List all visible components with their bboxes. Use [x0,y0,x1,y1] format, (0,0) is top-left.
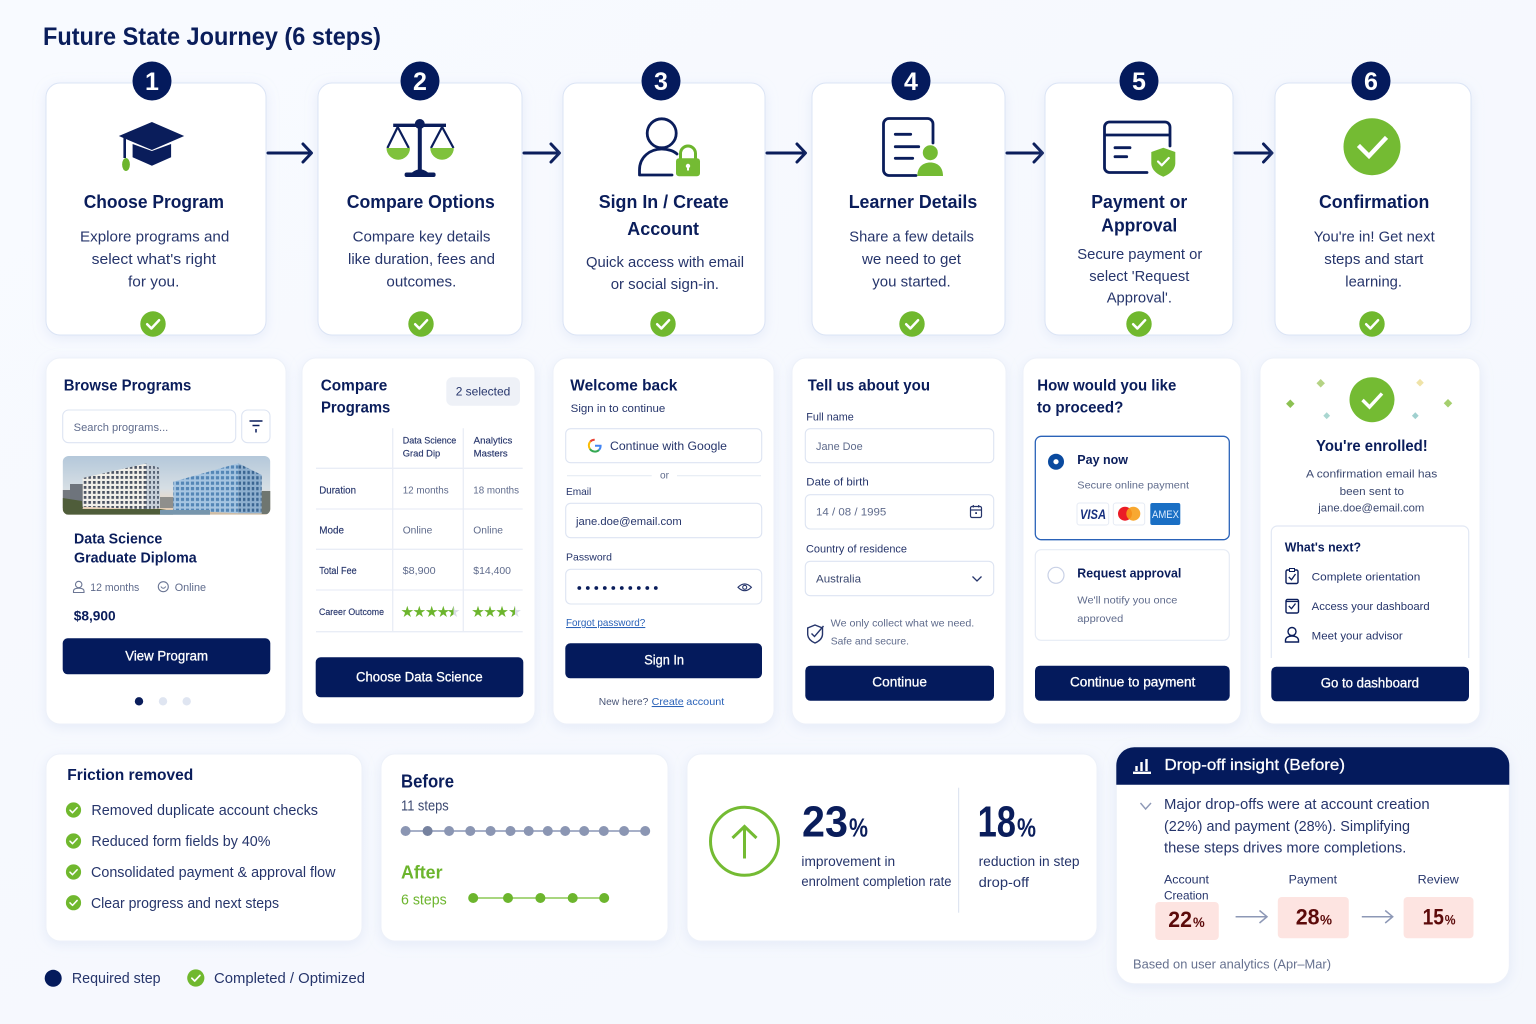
badge: 2 selected: 2 selected [456,385,510,399]
privacy note with shield icon [808,618,974,647]
arrow: payment to review [1362,910,1393,923]
panel: step 1 choose program [46,62,266,337]
field: date of birth: 14 / 08 / 1995 [816,507,886,519]
payment logo: mastercard [1113,503,1145,525]
panel: how would you like to proceed [1023,358,1241,724]
completed check [1359,311,1385,337]
title: Future State Journey (6 steps) [43,23,381,51]
source note: Based on user analytics (Apr–Mar) [1133,957,1331,971]
option: request approval: approved [1077,613,1123,625]
stage: payment 28%: Payment [1289,872,1338,886]
icon: large check [1344,118,1400,175]
insight text: Major drop-offs were at account creation [1164,797,1430,813]
program name: Data Science [74,530,162,547]
subheading: Sign in to continue [571,403,665,415]
button: continue: Continue [872,675,927,690]
comparison table: 18 months [473,484,519,496]
insight text: (22%) and payment (28%). Simplifying [1164,819,1410,835]
search field: Search programs... [74,422,168,434]
step number 1: 1 [145,68,159,96]
description: Secure payment or [1077,246,1202,263]
comparison table: $8,900 [403,565,436,577]
after step count: 6 steps [401,892,447,908]
button: continue [805,666,994,701]
arrow: account to payment [1236,910,1267,923]
button: continue to payment [1035,666,1230,701]
heading: Compare Options [347,191,495,212]
completed check [899,311,925,337]
arrow 4 to 5 [1007,144,1042,162]
button: go to dashboard [1271,667,1469,701]
field: full name: Jane Doe [816,441,863,453]
description: Quick access with email [586,254,744,271]
heading: Approval [1101,214,1177,236]
insight header [1116,747,1509,785]
stage: review 15%: % [1445,912,1456,928]
heading: Tell us about you [808,378,930,395]
icon: filter button [242,410,270,443]
field: country of residence: Australia [816,574,862,586]
program meta: duration and mode: Online [175,582,206,594]
item: clear progress: Clear progress and next steps [91,896,279,912]
rating stars: analytics [472,606,521,617]
before step count: 11 steps [401,799,449,815]
completed check [140,311,166,337]
stage: review 15% [1404,872,1474,938]
program name: Graduate Diploma [74,550,197,567]
create account prompt [599,696,724,708]
item: meet your advisor [1286,628,1403,642]
button: sign in [565,643,762,678]
stage: account creation 22%: Creation [1164,888,1208,902]
completed check [408,311,434,337]
description [1077,246,1202,307]
insight text [1164,797,1430,856]
panel: browse programs [46,358,286,724]
metric: 23% improvement: improvement in [801,854,895,869]
panel: outcome metrics [687,754,1097,941]
option: request approval: We'll notify you once [1077,594,1177,606]
program meta: duration and mode [74,581,206,594]
icon: document with person [884,118,943,176]
heading [1091,191,1187,236]
heading: Browse Programs [64,378,191,395]
rating stars: data science [401,606,459,617]
description: Approval'. [1107,290,1172,307]
legend: completed / optimized: Completed / Optimized [214,971,365,987]
carousel dots [135,697,191,706]
program meta: duration and mode: 12 months [90,582,140,594]
panel: step 3 sign in [563,62,765,337]
program name [74,530,197,567]
confirmation message [1306,469,1438,515]
payment logo: amex [1150,503,1180,525]
step number 6 [1352,62,1390,100]
panel: welcome back sign in [553,358,774,724]
heading: Payment or [1091,191,1187,212]
option: pay now: Secure online payment [1077,479,1189,491]
metric: 18% reduction [978,798,1080,890]
button: view program: View Program [125,649,208,664]
before timeline [401,826,650,836]
field: email [566,486,762,538]
button: continue with google [566,429,762,463]
heading: Choose Program [84,191,224,212]
comparison table: Masters [474,449,508,460]
description: for you. [128,274,179,290]
field: email: Email [566,486,591,498]
heading: Programs [321,400,390,417]
panel: friction removed [46,754,362,941]
heading: Sign In / Create [599,191,729,212]
comparison table: Total Fee [319,566,357,577]
heading: Compare [321,378,387,395]
comparison table: Online [473,524,503,536]
comparison table: Career Outcome [319,607,384,618]
stage: account creation 22%: 22 [1168,907,1192,932]
metric: 18% reduction: % [1017,813,1036,843]
description [586,254,744,293]
before heading: Before [401,771,454,791]
field: full name: Full name [806,412,854,424]
metric: 18% reduction: drop-off [979,875,1029,890]
panel: compare programs [302,358,535,724]
button: continue to payment: Continue to payment [1070,675,1196,690]
comparison table: Analytics [474,435,513,446]
payment logo: visa: VISA [1080,507,1106,522]
metric: 23% improvement [801,798,952,889]
insight header: Drop-off insight (Before) [1164,757,1345,774]
heading [321,378,390,417]
stage: payment 28%: % [1320,912,1333,928]
stage: account creation 22%: Account [1164,872,1210,886]
step number 4: 4 [904,68,918,96]
button: view program [63,638,270,674]
heading: Learner Details [849,191,977,212]
description: Compare key details [353,228,490,246]
item: access your dashboard: Access your dashboard [1312,601,1430,613]
comparison table: Mode [319,525,344,536]
heading [1037,378,1176,417]
description: or social sign-in. [611,276,719,293]
stage: review 15%: 15 [1423,904,1444,930]
option: pay now [1035,436,1229,540]
button: choose data science [316,657,523,697]
button: sign in: Sign In [644,652,684,667]
panel: step 5 payment or approval [1045,62,1233,337]
comparison table: Duration [319,485,356,496]
button: go to dashboard: Go to dashboard [1321,675,1419,690]
description: select what's right [92,251,217,268]
panel: step 6 confirmation [1275,62,1471,337]
step number 1 [132,62,172,100]
field: password: Password [566,552,612,564]
step number 4 [892,62,930,100]
description [348,228,495,290]
description [80,228,229,290]
price: $8,900 [74,608,116,624]
privacy note with shield icon: We only collect what we need. [831,618,974,630]
heading: to proceed? [1037,400,1123,417]
item: reduced form fields: Reduced form fields by 40% [91,834,271,850]
create account prompt: account [686,696,724,708]
comparison table: Data Science [403,435,456,446]
item: consolidated payment: Consolidated payment & approval flow [91,865,336,881]
arrow 2 to 3 [524,144,560,162]
completed check [1126,311,1152,337]
arrow 5 to 6 [1235,144,1272,162]
comparison table: Online [403,524,432,536]
step number 2 [400,62,440,100]
heading: Welcome back [570,378,677,395]
completed check [650,311,676,337]
comparison table: Grad Dip [403,449,440,460]
step number 5 [1120,62,1158,100]
icon: up arrow in circle [710,807,778,875]
legend [45,969,365,987]
payment logo: amex: AMEX [1152,509,1180,521]
confirmation message: A confirmation email has [1306,469,1438,481]
badge: 2 selected [446,377,520,406]
confirmation message: jane.doe@email.com [1317,503,1424,515]
field: date of birth [805,477,994,529]
heading: Friction removed [67,767,193,784]
description: outcomes. [386,274,456,290]
search field [63,410,236,443]
icon: graduation cap [119,122,184,171]
button: choose data science: Choose Data Science [356,670,483,685]
step number 3 [642,62,680,100]
stage: payment 28%: 28 [1296,904,1320,930]
field: full name [805,412,994,463]
icon: user with lock [640,119,700,176]
arrow 1 to 2 [268,144,312,162]
button: continue with google: Continue with Google [610,439,727,453]
item: removed duplicate account checks: Removed duplicate account checks [91,803,318,819]
option: pay now: Pay now [1077,453,1128,467]
confirmation message: been sent to [1340,486,1404,498]
insight text: these steps drives more completions. [1164,840,1406,856]
link: forgot password: Forgot password? [566,617,645,629]
field: country of residence [805,543,994,596]
metric: 23% improvement: 23 [802,798,848,847]
comparison table [316,428,523,632]
description [1314,228,1436,290]
heading: Confirmation [1319,191,1429,212]
stage: account creation 22% [1155,872,1219,940]
description: like duration, fees and [348,251,495,268]
arrow 3 to 4 [767,144,806,162]
what's next box [1271,526,1469,658]
icon: card with shield [1104,122,1175,177]
item: complete orientation: Complete orientation [1312,572,1420,584]
description: learning. [1345,274,1402,290]
heading: You're enrolled! [1316,438,1428,455]
stage: review 15%: Review [1418,872,1459,886]
what's next box: What's next? [1285,540,1361,555]
item: complete orientation [1286,568,1420,584]
item: meet your advisor: Meet your advisor [1312,630,1403,642]
field: email: jane.doe@email.com [575,516,682,528]
after timeline [468,893,609,903]
step number 6: 6 [1364,68,1378,96]
program photo: campus buildings [63,456,271,515]
field: date of birth: Date of birth [806,477,869,489]
privacy note with shield icon: Safe and secure. [831,635,909,647]
description: Explore programs and [80,228,229,246]
stage: payment 28% [1278,872,1349,938]
panel: step 4 learner details [812,62,1005,337]
description: steps and start [1324,251,1424,268]
create account prompt: Create [652,696,684,708]
icon: scales [386,119,454,177]
metric: 23% improvement: % [849,813,868,843]
step number 5: 5 [1132,68,1146,96]
payment logo: visa [1077,503,1109,525]
create account prompt: New here? [599,696,648,708]
field: password [566,552,762,604]
metric: 18% reduction: reduction in step [979,854,1080,869]
heading [599,191,729,239]
description: You're in! Get next [1314,228,1436,246]
after heading: After [401,862,442,882]
description [849,228,974,290]
stage: account creation 22%: % [1193,914,1205,930]
comparison table: 12 months [403,484,449,496]
description: you started. [872,274,951,290]
metric: 18% reduction: 18 [978,798,1016,847]
or divider: or [660,470,669,482]
panel: drop-off insight [1116,747,1509,984]
legend: required step: Required step [72,971,161,987]
heading: How would you like [1037,378,1176,395]
panel: you're enrolled [1260,358,1480,724]
panel: before and after steps [381,754,668,941]
step number 3: 3 [654,68,668,96]
icon: success check with confetti [1286,377,1452,422]
metric: 23% improvement: enrolment completion rate [801,874,952,889]
panel: step 2 compare options [318,62,522,337]
description: Share a few details [849,228,974,246]
comparison table: $14,400 [473,565,511,577]
step number 2: 2 [413,68,427,96]
panel: tell us about you [792,358,1006,724]
field: country of residence: Country of residence [806,543,907,555]
option: request approval: Request approval [1077,566,1181,580]
description: we need to get [861,251,962,268]
description: select 'Request [1089,268,1190,285]
heading: Account [627,218,699,239]
option: request approval [1035,550,1229,640]
icon: chevron [1140,803,1151,809]
